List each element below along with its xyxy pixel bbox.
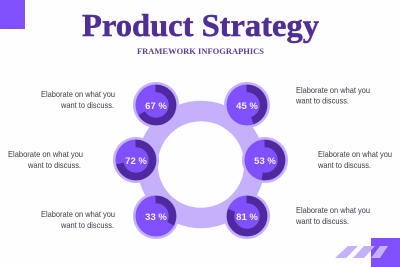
text block: middle right bbox=[317, 150, 392, 170]
donut: 33 percent bbox=[133, 193, 179, 239]
text block: middle left: want to discuss. bbox=[27, 161, 81, 170]
text block: bottom right: Elaborate on what you bbox=[296, 206, 370, 215]
donut: 72 percent: 72 % bbox=[125, 156, 147, 167]
subtitle: FRAMEWORK INFOGRAPHICS bbox=[137, 47, 264, 56]
text block: bottom right bbox=[295, 206, 370, 226]
text block: top right: want to discuss. bbox=[295, 96, 349, 106]
corner square: bottom right bbox=[371, 238, 400, 267]
donut: 45 percent: 45 % bbox=[236, 101, 258, 112]
text block: bottom right: want to discuss. bbox=[295, 217, 349, 226]
central ring bbox=[148, 111, 254, 218]
text block: top left: want to discuss. bbox=[60, 101, 114, 110]
donut: 67 percent: 67 % bbox=[145, 101, 167, 112]
text block: bottom left bbox=[41, 210, 115, 230]
text block: top left: Elaborate on what you bbox=[41, 90, 115, 99]
donut: 67 percent bbox=[133, 82, 179, 128]
text block: middle right: Elaborate on what you bbox=[318, 150, 392, 159]
donut: 81 percent: 81 % bbox=[236, 212, 258, 223]
text block: top left bbox=[41, 90, 115, 110]
donut: 72 percent bbox=[113, 137, 159, 183]
donut: 45 percent bbox=[224, 82, 270, 128]
text block: bottom left: want to discuss. bbox=[60, 221, 114, 230]
donut: 33 percent: 33 % bbox=[145, 212, 167, 223]
text block: middle left: Elaborate on what you bbox=[8, 150, 83, 159]
donut: 53 percent: 53 % bbox=[254, 156, 276, 167]
donut: 53 percent bbox=[242, 137, 288, 183]
donut: 81 percent bbox=[224, 193, 270, 239]
text block: bottom left: Elaborate on what you bbox=[41, 210, 115, 219]
stripes bbox=[335, 246, 388, 258]
corner square: top left bbox=[0, 0, 25, 29]
text block: top right: Elaborate on what you bbox=[296, 86, 370, 95]
text block: top right bbox=[295, 86, 370, 106]
text block: middle left bbox=[8, 150, 83, 170]
text block: middle right: want to discuss. bbox=[317, 161, 371, 170]
title: Product Strategy bbox=[82, 7, 319, 43]
